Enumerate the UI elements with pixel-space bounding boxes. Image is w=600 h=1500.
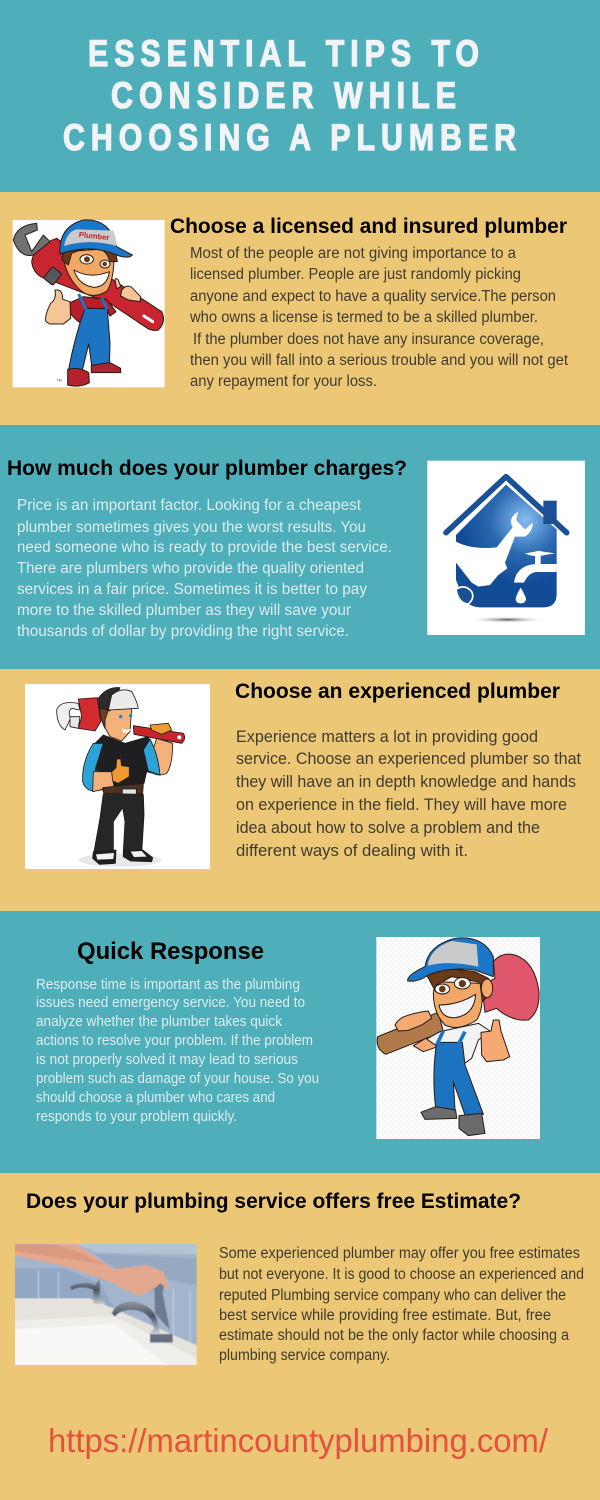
body text: There are plumbers who provide the quality oriented [17, 560, 364, 577]
title: ESSENTIAL TIPS TO [88, 33, 485, 74]
body text: plumbing service company. [219, 1347, 390, 1364]
body text: anyone and expect to have a quality service.The person [190, 288, 556, 305]
panel: free estimate [0, 1173, 600, 1500]
body text [219, 1245, 584, 1364]
body text [189, 245, 569, 390]
body text: who owns a license is termed to be a skilled plumber. [189, 309, 538, 326]
website URL: https://martincountyplumbing.com/ [48, 1422, 549, 1459]
body text: is not properly solved it may lead to serious [36, 1052, 298, 1068]
body text: best service while providing free estimate. But, free [219, 1307, 551, 1324]
body text: actions to resolve your problem. If the problem [36, 1033, 313, 1049]
body text: Some experienced plumber may offer you free estimates [219, 1245, 580, 1262]
body text [236, 727, 581, 860]
heading: How much does your plumber charges? [7, 457, 407, 480]
photo: hand turning a tap over a white sink [13, 1243, 200, 1367]
body text: on experience in the field. They will have more [236, 795, 567, 814]
image: plumber with wrench and thumbs up: TM [57, 378, 62, 382]
body text [17, 497, 392, 640]
body text: Price is an important factor. Looking for a cheapest [17, 497, 362, 514]
heading: Choose an experienced plumber [235, 680, 560, 703]
body text [36, 977, 319, 1125]
panel: experienced plumber [0, 669, 600, 911]
body text: should choose a plumber who cares and [36, 1090, 275, 1106]
panel: plumber charges [0, 425, 600, 669]
body text: problem such as damage of your house. So you [36, 1071, 319, 1087]
body text: issues need emergency service. You need to [36, 995, 305, 1011]
title [63, 33, 522, 158]
body text: Response time is important as the plumbing [36, 977, 300, 993]
body text: then you will fall into a serious trouble and you will not get [190, 352, 569, 369]
heading: Quick Response [77, 938, 264, 965]
body text: licensed plumber. People are just randomly picking [190, 266, 521, 283]
body text: they will have an in depth knowledge and hands [236, 772, 576, 791]
panel: licensed and insured plumber [0, 192, 600, 425]
body text: idea about how to solve a problem and the [236, 818, 540, 837]
body text: services in a fair price. Sometimes it is better to pay [17, 581, 367, 598]
body text: more to the skilled plumber as they will save your [17, 602, 351, 619]
image: plumber carrying pipe wrench [25, 684, 210, 869]
image: plumber holding plunger [376, 937, 540, 1139]
title: CONSIDER WHILE [111, 75, 462, 116]
body text: plumber sometimes gives you the worst results. You [17, 519, 366, 536]
heading: Choose a licensed and insured plumber [170, 215, 567, 238]
icon: house with wrench and tap logo [427, 461, 585, 635]
body text: estimate should not be the only factor while choosing a [219, 1327, 569, 1344]
body text: service. Choose an experienced plumber so that [236, 749, 581, 768]
panel: title banner [0, 0, 600, 192]
body text: analyze whether the plumber takes quick [36, 1014, 283, 1030]
body text: thousands of dollar by providing the right service. [17, 623, 349, 640]
body text: responds to your problem quickly. [36, 1109, 237, 1125]
body text: different ways of dealing with it. [236, 841, 468, 860]
heading: Does your plumbing service offers free Estimate? [26, 1190, 521, 1213]
panel: quick response [0, 911, 600, 1173]
body text: need someone who is ready to provide the best service. [17, 539, 392, 556]
body text: reputed Plumbing service company who can deliver the [219, 1287, 566, 1304]
body text: If the plumber does not have any insurance coverage, [193, 331, 544, 348]
image: plumber with wrench and thumbs up [13, 220, 165, 387]
body text: Most of the people are not giving importance to a [190, 245, 516, 262]
body text: Experience matters a lot in providing good [236, 727, 538, 746]
body text: any repayment for your loss. [190, 373, 377, 390]
image: plumber with wrench and thumbs up: Plumber [78, 230, 110, 242]
